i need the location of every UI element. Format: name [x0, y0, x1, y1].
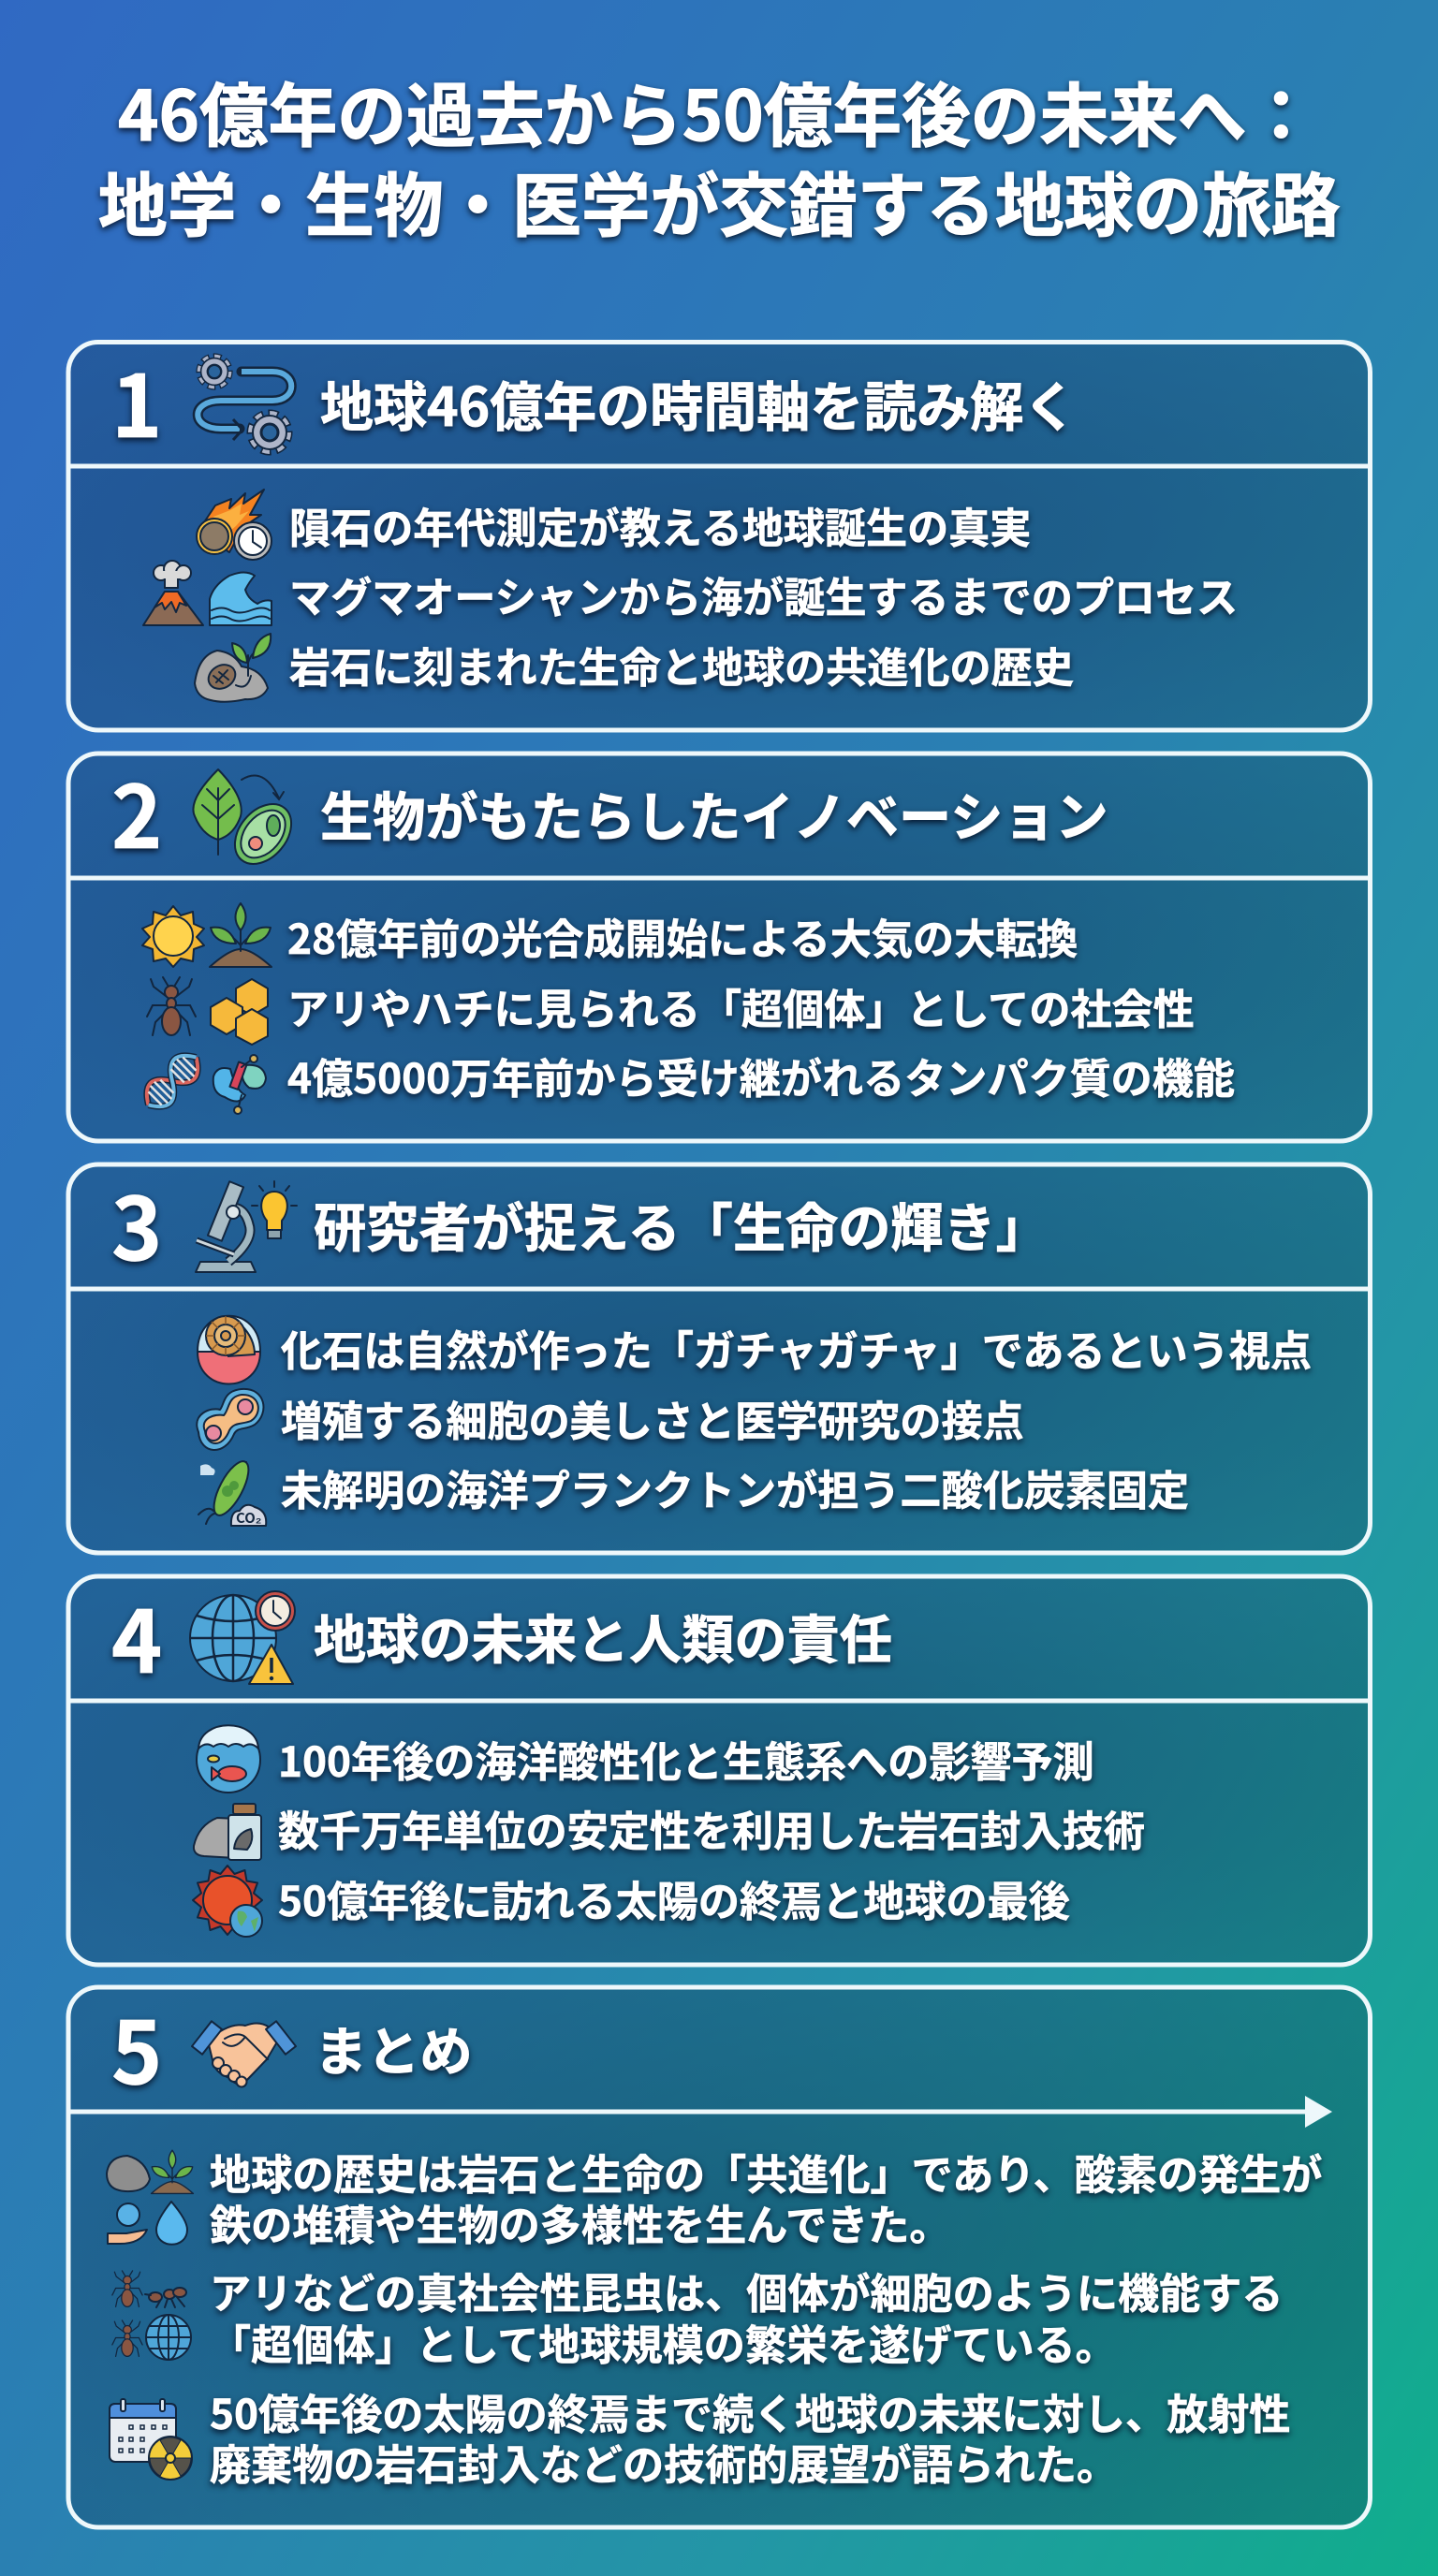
bullet 2-2: アリやハチに見られる「超個体」としての社会性: [287, 976, 1195, 1036]
number 5: 5: [111, 1984, 162, 2109]
summary text 2: アリなどの真社会性昆虫は、個体が細胞のように機能する: [210, 2261, 1283, 2320]
summary text 3: [210, 2381, 1290, 2492]
icon: red sun and earth: [193, 1866, 262, 1937]
icon: volcano and wave: [143, 561, 271, 625]
bullet 2-1: 28億年前の光合成開始による大気の大転換: [287, 906, 1078, 966]
title: 地学・生物・医学が交錯する地球の旅路: [98, 152, 1340, 251]
bullet 1-1: 隕石の年代測定が教える地球誕生の真実: [289, 495, 1031, 555]
summary text 1: [210, 2142, 1322, 2252]
summary text 3: 50億年後の太陽の終焉まで続く地球の未来に対し、放射性: [210, 2381, 1290, 2441]
title: [98, 62, 1340, 251]
icon: gears and process path: [198, 358, 291, 450]
icon: dividing cell: [197, 1389, 263, 1450]
heading 4: 地球の未来と人類の責任: [314, 1599, 892, 1675]
heading 5: まとめ: [315, 2011, 473, 2086]
panel 1: timeline: [68, 338, 1371, 730]
bullet 4-3: 50億年後に訪れる太陽の終焉と地球の最後: [278, 1868, 1070, 1928]
summary text 2: 「超個体」として地球規模の繁栄を遂げている。: [210, 2312, 1117, 2372]
panel 4: future: [68, 1573, 1371, 1965]
heading 1: 地球46億年の時間軸を読み解く: [320, 365, 1077, 442]
panel 2: innovation: [68, 749, 1371, 1141]
bullet 2-3: 4億5000万年前から受け継がれるタンパク質の機能: [287, 1046, 1235, 1105]
icon: meteor and clock: [197, 490, 271, 560]
bullet 3-1: 化石は自然が作った「ガチャガチャ」であるという視点: [281, 1318, 1312, 1378]
summary text 1: 地球の歴史は岩石と生命の「共進化」であり、酸素の発生が: [210, 2142, 1322, 2202]
icon: sun and sprout: [142, 903, 271, 967]
icon: ants and globe: [112, 2271, 191, 2360]
bullet 3-3: 未解明の海洋プランクトンが担う二酸化炭素固定: [281, 1457, 1189, 1517]
icon: handshake: [192, 2021, 296, 2087]
panel 5: summary: [68, 1984, 1371, 2527]
title: 46億年の過去から50億年後の未来へ：: [118, 62, 1315, 161]
icon: microscope and bulb: [196, 1181, 297, 1272]
icon: fossil rock and sprout: [195, 634, 271, 702]
bullet 3-2: 増殖する細胞の美しさと医学研究の接点: [281, 1388, 1024, 1448]
icon: fossil capsule: [198, 1316, 260, 1383]
icon: rock and jar: [194, 1804, 261, 1860]
summary text 2: [210, 2261, 1283, 2372]
arrow divider: [68, 2096, 1332, 2128]
icon: ant and honeycomb: [147, 977, 268, 1045]
bullet 4-2: 数千万年単位の安定性を利用した岩石封入技術: [278, 1798, 1145, 1858]
icon: plankton and CO2: CO₂: [236, 1508, 261, 1528]
bullet 1-3: 岩石に刻まれた生命と地球の共進化の歴史: [289, 635, 1074, 695]
panel 3: researchers: [68, 1161, 1371, 1553]
heading 2: 生物がもたらしたイノベーション: [320, 776, 1108, 852]
icon: rock, sprout, hand, drop: [107, 2150, 193, 2245]
summary text 1: 鉄の堆積や生物の多様性を生んできた。: [210, 2192, 950, 2252]
icon: globe, clock, warning: [190, 1591, 295, 1684]
icon: plankton and CO2: [198, 1456, 266, 1528]
number 3: 3: [111, 1161, 162, 1285]
bullet 4-1: 100年後の海洋酸性化と生態系への影響予測: [278, 1729, 1094, 1789]
icon: calendar and radiation: [110, 2399, 194, 2480]
summary text 3: 廃棄物の岩石封入などの技術的展望が語られた。: [210, 2432, 1118, 2492]
heading 3: 研究者が捉える「生命の輝き」: [314, 1187, 1049, 1263]
icon: leaf and cell: [193, 769, 302, 875]
icon: DNA and protein: [139, 1047, 266, 1115]
number 1: 1: [111, 338, 162, 462]
bullet 1-2: マグマオーシャンから海が誕生するまでのプロセス: [289, 564, 1238, 624]
number 4: 4: [111, 1573, 162, 1698]
number 2: 2: [111, 749, 162, 873]
icon: fish bowl: [197, 1725, 260, 1793]
